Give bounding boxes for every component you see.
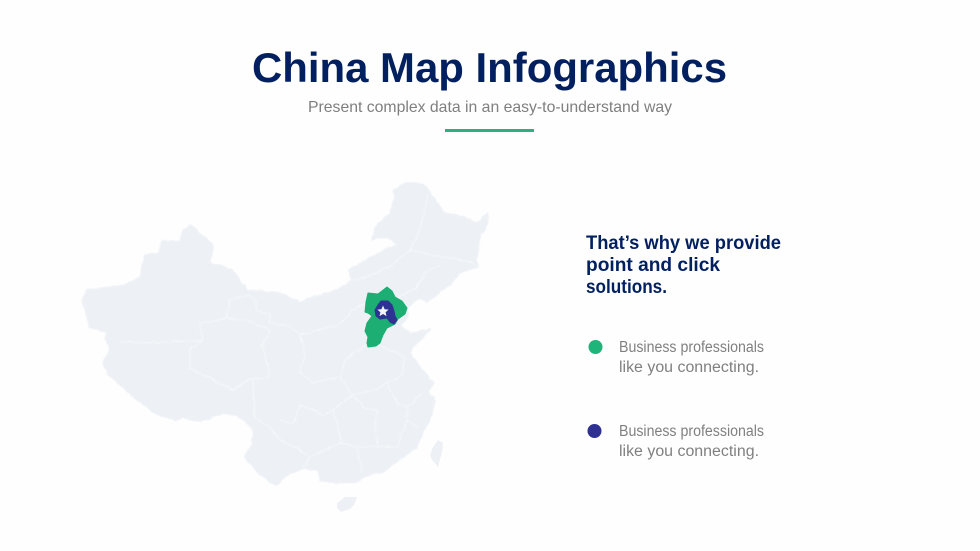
heading xyxy=(586,233,781,298)
legend text: Business professionals xyxy=(619,423,764,440)
subtitle: Present complex data in an easy-to-understand way xyxy=(308,99,672,116)
icon: capital star xyxy=(377,306,389,316)
province borders xyxy=(120,195,477,472)
icon: green dot xyxy=(588,340,602,354)
title underline accent xyxy=(445,129,534,132)
legend item: blue xyxy=(588,423,764,460)
highlighted region: green xyxy=(365,287,407,347)
legend text xyxy=(619,339,764,376)
legend item: green xyxy=(588,339,764,376)
Hainan xyxy=(337,497,357,512)
title: China Map Infographics xyxy=(252,44,727,91)
legend text: like you connecting. xyxy=(619,359,759,376)
heading: point and click xyxy=(586,255,720,276)
Taiwan xyxy=(430,440,443,467)
heading: solutions. xyxy=(586,277,667,298)
highlighted region: blue xyxy=(375,301,397,324)
map: China xyxy=(82,183,488,512)
legend text: Business professionals xyxy=(619,339,764,356)
heading: That’s why we provide xyxy=(586,233,781,254)
icon: blue dot xyxy=(588,424,602,438)
mainland silhouette xyxy=(82,183,488,485)
legend text xyxy=(619,423,764,460)
legend text: like you connecting. xyxy=(619,443,759,460)
